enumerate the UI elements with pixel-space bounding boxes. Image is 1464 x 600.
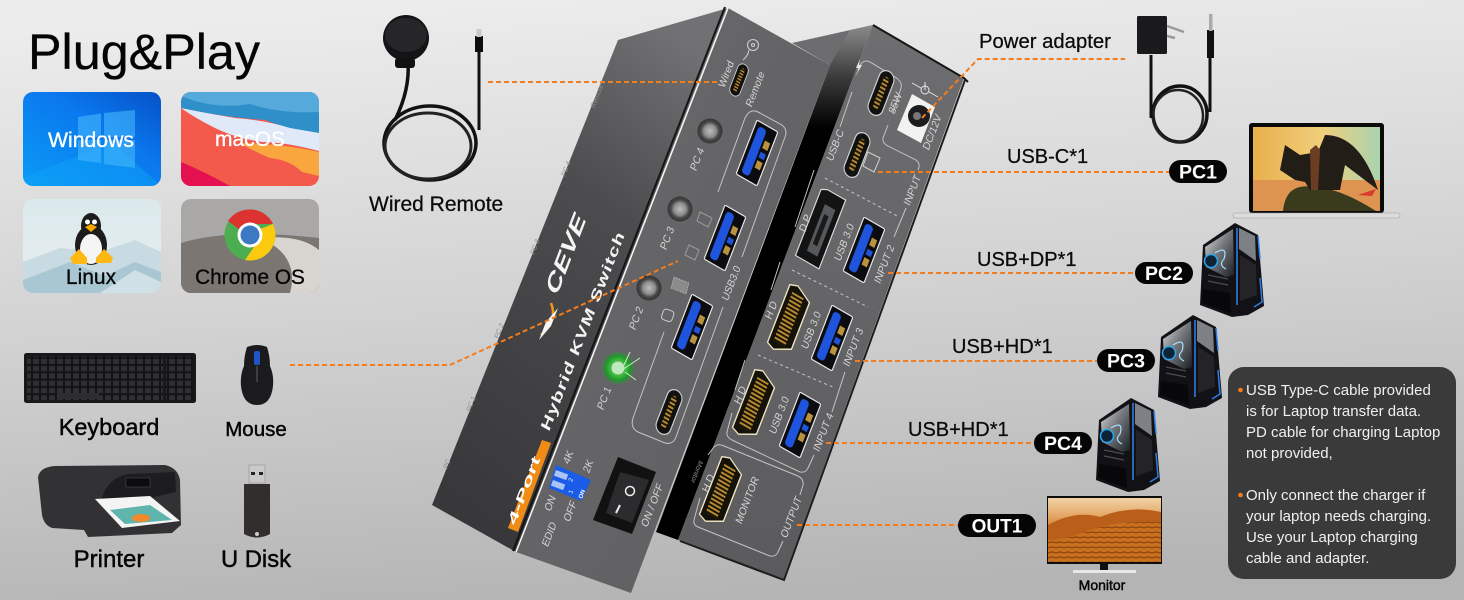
- label: EDID: EDID: [540, 519, 559, 549]
- text block: second note: Only connect the charger if: [1246, 487, 1426, 504]
- tile: Linux: [23, 199, 161, 293]
- port: Wired Remote USB-C: [728, 62, 750, 98]
- EDID DIP switch: ON: [578, 489, 587, 500]
- port: DC power jack: [897, 94, 935, 143]
- icon: monitor: [1047, 496, 1162, 573]
- label: INPUT: INPUT: [902, 172, 924, 208]
- label: 85W: 85W: [886, 90, 905, 116]
- icon: PC tower 3: [1158, 315, 1222, 409]
- label: USB3.0: USB3.0: [720, 263, 743, 303]
- port: USB-A third: [671, 294, 713, 360]
- icon: U disk glyph: [685, 245, 699, 260]
- icon: laptop: [1233, 123, 1400, 218]
- badge: PC4: PC4: [1044, 433, 1082, 455]
- label: tiny top-face port names: [443, 83, 605, 471]
- arrow: mouse to USB: [290, 261, 678, 365]
- arrow: PC2: [888, 272, 1135, 274]
- EDID DIP switch: [549, 465, 591, 501]
- icon: mouse: [241, 345, 273, 405]
- tile: Chrome OS: Chrome OS: [195, 266, 305, 289]
- port: USB-C bottom: [654, 387, 684, 437]
- KVM rear unit: [656, 25, 968, 580]
- label: tiny top-face port names: PC 1: [466, 395, 478, 413]
- port: USB-A input 4: [779, 392, 821, 458]
- button: PC 3: [668, 196, 692, 222]
- panel outlines: [694, 61, 919, 556]
- label: ON: ON: [543, 493, 559, 514]
- label: U Disk: U Disk: [221, 546, 291, 573]
- text block: second note: cable and adapter.: [1246, 550, 1369, 567]
- EDID DIP switch: 2: [568, 477, 575, 483]
- label: ON / OFF: ON / OFF: [639, 481, 666, 529]
- badge: OUT1: OUT1: [972, 516, 1023, 538]
- icon: keyboard glyph: [671, 277, 689, 294]
- label: D P: D P: [797, 212, 814, 234]
- panel: front face: [516, 8, 830, 593]
- label: PC 3: PC 3: [658, 224, 677, 252]
- label: Remote: Remote: [744, 69, 767, 109]
- label: Monitor: Monitor: [1079, 577, 1126, 593]
- label: tiny top-face port names: PC 4: [561, 160, 573, 178]
- port: USB-A second: [704, 205, 746, 271]
- label: USB+HD*1: USB+HD*1: [908, 419, 1009, 441]
- badge: 4-Port: [506, 440, 551, 532]
- label: INPUT 2: INPUT 2: [872, 243, 897, 286]
- badge: PC1: [1169, 160, 1227, 184]
- label: Keyboard: Keyboard: [59, 414, 159, 440]
- panel: top face: [432, 8, 728, 552]
- label: OFF: OFF: [562, 499, 580, 524]
- label: USB 3.0 input 4: USB 3.0: [767, 394, 792, 437]
- text block: first note: PD cable for charging Laptop: [1246, 424, 1440, 441]
- badge: PC4: [1034, 432, 1092, 455]
- button: PC 4: [698, 118, 722, 144]
- icon: PC tower 2: [1200, 223, 1264, 317]
- arrow: PC4: [826, 442, 1034, 444]
- label: DC/12V: DC/12V: [921, 112, 944, 152]
- logo: CEVE: CEVE: [540, 208, 592, 298]
- label: tiny top-face port names: PC 3: [530, 238, 542, 256]
- label: USB 3.0: USB 3.0: [832, 221, 857, 264]
- icon: PC tower 4: [1096, 398, 1160, 492]
- text block: second note: your laptop needs charging.: [1246, 508, 1431, 525]
- icon: penguin: [70, 213, 113, 265]
- icon: printer glyph: [697, 212, 712, 227]
- arrow: power adapter: [922, 59, 1125, 118]
- arrow: PC1: [878, 171, 1169, 173]
- badge: PC1: PC1: [1179, 162, 1217, 184]
- port: HDMI monitor: [698, 454, 745, 530]
- tile: Windows: [23, 92, 161, 186]
- callout: cable notes: [1228, 367, 1456, 579]
- tile: Chrome OS: [181, 199, 319, 293]
- panel: operating systems: [23, 92, 319, 293]
- icon: U disk: [244, 465, 270, 538]
- label: Wired: Wired: [716, 58, 737, 90]
- icon: lightning mark: [855, 59, 862, 77]
- label: PC 2: PC 2: [627, 304, 646, 332]
- bullet: [1238, 493, 1243, 497]
- icon: wired remote: [383, 15, 483, 180]
- KVM front unit: [432, 7, 830, 593]
- arrow: PC3: [855, 360, 1097, 362]
- badge: 4-Port: 4-Port: [506, 453, 543, 528]
- label: Wired Remote: Wired Remote: [369, 193, 503, 216]
- tile: Windows: Windows: [48, 129, 134, 152]
- label: H D 4: H D: [732, 384, 749, 407]
- label: tiny top-face port names: PC 2: [494, 322, 506, 340]
- label: MONITOR: MONITOR: [733, 474, 762, 526]
- port: HDMI input 3: [766, 282, 813, 358]
- icon: power adapter: [1137, 14, 1214, 142]
- icon: mouse glyph: [661, 308, 675, 322]
- text block: first note: USB Type-C cable provided: [1246, 382, 1431, 399]
- label: INPUT 3: INPUT 3: [841, 326, 866, 369]
- label: USB+HD*1: USB+HD*1: [952, 336, 1053, 358]
- label: OUTPUT: OUTPUT: [779, 494, 805, 540]
- badge: PC3: PC3: [1107, 350, 1145, 372]
- port: USB-C input 1: [842, 130, 872, 180]
- port: USB-A input 3: [811, 305, 853, 371]
- tile: Linux: Linux: [66, 266, 117, 289]
- bullet: [1238, 388, 1243, 392]
- title: Plug&Play: [28, 23, 261, 80]
- label: Power adapter: Power adapter: [979, 31, 1111, 53]
- LED: PC 1: [601, 351, 640, 385]
- port: DisplayPort: [796, 187, 846, 269]
- label: 4K: 4K: [561, 448, 576, 466]
- icon: keyboard: [24, 353, 196, 403]
- panel outlines: [632, 111, 786, 443]
- logo: CEVE: [539, 208, 592, 340]
- icon: DC polarity: [912, 82, 938, 97]
- badge: PC2: [1135, 262, 1193, 285]
- icon: printer: [38, 465, 181, 537]
- label: Monitor on underside: Monitor: [689, 459, 703, 485]
- label: tiny top-face port names: Remote: [590, 83, 605, 109]
- label: tiny top-face port names: PC: [443, 458, 452, 471]
- label: 2K: 2K: [581, 457, 596, 475]
- text block: first note: not provided,: [1246, 445, 1333, 462]
- tile: macOS: [181, 92, 319, 186]
- text block: second note: Use your Laptop charging: [1246, 529, 1418, 546]
- label: Mouse: Mouse: [225, 418, 287, 441]
- button: PC 2: [636, 276, 662, 300]
- label: USB-C: USB-C: [824, 127, 847, 164]
- label: Printer: Printer: [74, 546, 144, 573]
- label: PC 1: PC 1: [595, 384, 614, 412]
- icon: Chrome logo: [224, 209, 276, 260]
- port: USB-A top: [736, 120, 778, 186]
- port: USB-C 85W: [866, 68, 896, 118]
- label: USB 3.0 input 3: USB 3.0: [799, 309, 824, 352]
- text block: first note: [1246, 382, 1440, 462]
- label: USB+DP*1: USB+DP*1: [977, 249, 1076, 271]
- port: USB-A input 2: [843, 217, 885, 283]
- badge: OUT1: [958, 514, 1036, 538]
- badge: PC3: [1097, 349, 1155, 372]
- tile: macOS: macOS: [215, 128, 285, 151]
- label: PC 4: PC 4: [688, 145, 707, 173]
- label: H D monitor: H D: [700, 472, 717, 495]
- arrow: remote to port: [488, 81, 718, 83]
- icon: laptop: [863, 152, 880, 172]
- rocker switch: [593, 457, 656, 534]
- badge: PC2: PC2: [1145, 263, 1183, 285]
- label: USB-C*1: USB-C*1: [1007, 146, 1088, 168]
- icon: remote jack: [743, 40, 758, 60]
- label: H D 3: H D: [763, 299, 780, 322]
- label: Hybrid KVM Switch: Hybrid KVM Switch: [538, 228, 628, 434]
- EDID DIP switch: 1: [568, 489, 575, 495]
- label: INPUT 4: INPUT 4: [811, 411, 836, 454]
- text block: first note: is for Laptop transfer data.: [1246, 403, 1421, 420]
- text block: second note: [1246, 487, 1431, 567]
- arrow: OUT1: [797, 524, 958, 526]
- port: HDMI input 4: [731, 367, 778, 443]
